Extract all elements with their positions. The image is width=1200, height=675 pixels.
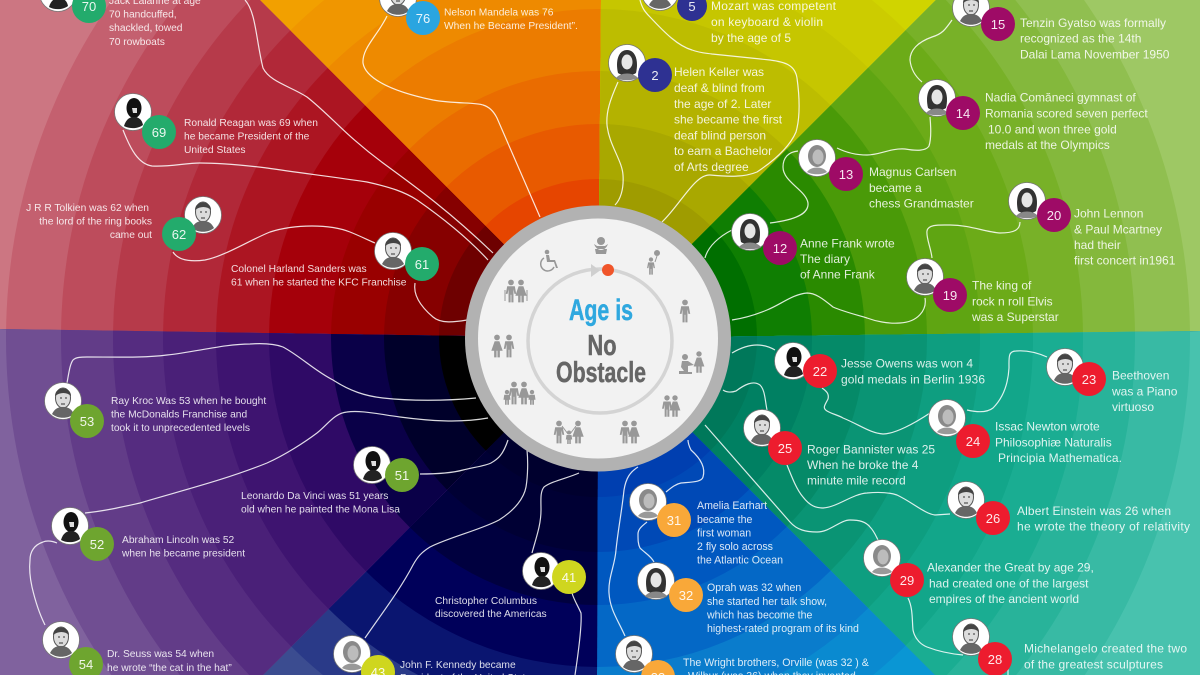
person: John F. Kennedy, 43 [334, 636, 536, 675]
person: Jack Lalanne, 70: 70 rowboats [109, 37, 165, 48]
person: Magnus Carlsen, 13: 13 [839, 167, 853, 182]
person: Anne Frank, 12: 12 [773, 241, 787, 256]
person: Leonardo Da Vinci, 51: 51 [395, 468, 409, 483]
person: Roger Bannister, 25: 25 [778, 441, 792, 456]
person: Ray Kroc, 53: 53 [80, 414, 94, 429]
person: Jesse Owens, 22 [774, 342, 985, 388]
person: Ronald Reagan, 69: United States [184, 145, 246, 156]
person: Magnus Carlsen, 13: chess Grandmaster [869, 196, 974, 210]
sector: purple, fifties [0, 329, 504, 675]
person: Amelia Earhart, 31: became the [697, 514, 752, 526]
person: Abraham Lincoln, 52 [52, 508, 245, 561]
person: John Lennon, 20 [1008, 182, 1176, 268]
sector: teal, twenties [692, 331, 1200, 675]
person: Dr. Seuss, 54: Dr. Seuss was 54 when [107, 649, 214, 660]
person: Ronald Reagan, 69: he became President of the [184, 132, 310, 142]
person: J R R Tolkien, 62 [26, 196, 222, 251]
person: Roger Bannister, 25: Roger Bannister was 25 [807, 442, 935, 456]
person: Abraham Lincoln, 52: Abraham Lincoln was 52 [122, 535, 235, 546]
person: Helen Keller, 2: the age of 2. Later [674, 97, 771, 111]
person: Magnus Carlsen, 13 [798, 140, 974, 210]
person: Albert Einstein, 26 [948, 482, 1190, 535]
person: Leonardo Da Vinci, 51: old when he painted the Mona Lisa [241, 504, 400, 516]
person: Amelia Earhart, 31: the Atlantic Ocean [697, 554, 783, 566]
person: J R R Tolkien, 62: 62 [172, 227, 186, 242]
person: Oprah, 32 [638, 562, 859, 635]
person: Magnus Carlsen, 13: Magnus Carlsen [869, 165, 956, 179]
person: Amelia Earhart, 31: 2 fly solo across [697, 541, 773, 553]
person: Colonel Harland Sanders, 61: 61 [415, 257, 429, 272]
person: Jesse Owens, 22: 22 [813, 364, 827, 379]
person: Christopher Columbus, 41: discovered the Americas [435, 609, 547, 620]
person: Alexander the Great, 29: empires of the ancient world [929, 592, 1079, 606]
person: Beethoven, 23: 23 [1082, 372, 1096, 387]
person: Mozart, 5: on keyboard & violin [711, 15, 823, 29]
person: Elvis, 19: rock n roll Elvis [972, 294, 1053, 308]
person: Jack Lalanne, 70 [40, 0, 201, 48]
person: Isaac Newton, 24: Principia Mathematica. [998, 451, 1122, 465]
person: Isaac Newton, 24: Issac Newton wrote [995, 420, 1100, 434]
person: Nadia Comaneci, 14 [918, 80, 1148, 152]
person: Ray Kroc, 53: Ray Kroc Was 53 when he bought [111, 396, 266, 407]
person: Isaac Newton, 24: Philosophiæ Naturalis [995, 436, 1112, 450]
title: Age is No Obstacle: No [588, 330, 616, 362]
person: Nelson Mandela, 76: 76 [416, 11, 430, 26]
person: John Lennon, 20: had their [1074, 238, 1121, 252]
person: Anne Frank, 12: The diary [800, 252, 850, 266]
person: Isaac Newton, 24 [928, 400, 1122, 465]
title: Age is No Obstacle: Obstacle [556, 357, 646, 389]
sector: blue, thirties [597, 432, 935, 675]
person: J R R Tolkien, 62: the lord of the ring books [39, 216, 152, 228]
person: Jack Lalanne, 70: 70 handcuffed, [109, 10, 177, 20]
sector: navy, forties [264, 432, 598, 675]
life-stage icons [491, 237, 704, 444]
icon: parents and child [554, 421, 584, 444]
person: John Lennon, 20: & Paul Mcartney [1074, 222, 1162, 236]
person: Magnus Carlsen, 13: became a [869, 181, 922, 195]
person: Tenzin Gyatso, 15 [952, 0, 1170, 62]
person: Wright brothers, 33: The Wright brothers, Orville (was 32 ) & [683, 657, 869, 669]
person: Michelangelo, 28: 28 [988, 652, 1002, 667]
sector: green, teens [692, 0, 1200, 336]
person: Ray Kroc, 53: took it to unprecedented levels [111, 423, 250, 434]
person: Nadia Comaneci, 14: Romania scored seven perfect [985, 106, 1148, 120]
title: Age is No Obstacle [556, 294, 646, 389]
title: Age is No Obstacle: Age is [569, 294, 633, 327]
person: Ronald Reagan, 69: Ronald Reagan was 69 when [184, 118, 318, 129]
person: Beethoven, 23: virtuoso [1112, 400, 1154, 414]
person: John Lennon, 20: John Lennon [1074, 206, 1143, 220]
icon: family of four [503, 382, 536, 405]
person: John Lennon, 20: 20 [1047, 208, 1061, 223]
hub outer grey ring [465, 206, 731, 472]
person: Nelson Mandela, 76 [380, 0, 578, 35]
person: Roger Bannister, 25: When he broke the 4 [807, 458, 919, 472]
person: Anne Frank, 12: Anne Frank wrote [800, 236, 895, 250]
person: Michelangelo, 28: Michelangelo created the two [1024, 642, 1187, 656]
icon: adult couple [491, 335, 514, 357]
person: Leonardo Da Vinci, 51: Leonardo Da Vinci was 51 years [241, 491, 388, 502]
person: Anne Frank, 12: of Anne Frank [800, 268, 876, 282]
person: John F. Kennedy, 43: John F. Kennedy became [400, 660, 516, 671]
icon: man [680, 300, 690, 322]
person: Roger Bannister, 25: minute mile record [807, 474, 906, 488]
person: Beethoven, 23: Beethoven [1112, 368, 1169, 382]
person: Mozart, 5: by the age of 5 [711, 31, 791, 45]
icon: couple [662, 395, 680, 417]
person: Wright brothers, 33 [616, 636, 869, 675]
person: Ray Kroc, 53 [44, 382, 266, 438]
person: Alexander the Great, 29 [864, 540, 1094, 606]
icon: baby [594, 237, 608, 254]
person: Oprah, 32: 32 [679, 588, 693, 603]
person: Anne Frank, 12 [732, 214, 895, 282]
person: Albert Einstein, 26: 26 [986, 511, 1000, 526]
person: Amelia Earhart, 31 [630, 484, 783, 566]
hub: central dial with life stages [465, 206, 731, 472]
person: Isaac Newton, 24: 24 [966, 434, 980, 449]
sector: yellow, childhood [599, 0, 936, 244]
sector: red, ages 60s [0, 0, 504, 336]
person: Christopher Columbus, 41: Christopher Columbus [435, 596, 537, 607]
icon: wheelchair [541, 250, 558, 271]
icon: child with balloon [647, 250, 660, 275]
person: Jack Lalanne, 70: shackled, towed [109, 23, 183, 34]
person: Helen Keller, 2: of Arts degree [674, 160, 749, 174]
person: Jesse Owens, 22: Jesse Owens was won 4 [841, 356, 973, 370]
person: Nadia Comaneci, 14: medals at the Olympics [985, 138, 1110, 152]
person: Ronald Reagan, 69: 69 [152, 125, 166, 140]
person: Helen Keller, 2: 2 [651, 68, 659, 83]
person: Amelia Earhart, 31: first woman [697, 528, 751, 540]
person: Albert Einstein, 26: he wrote the theory of relativity [1017, 520, 1190, 534]
person: Christopher Columbus, 41 [435, 552, 586, 620]
person: J R R Tolkien, 62: J R R Tolkien was 62 when [26, 203, 149, 214]
person: Tenzin Gyatso, 15: Tenzin Gyatso was formally [1020, 16, 1166, 30]
icon: couple with baby [620, 421, 640, 443]
person: Roger Bannister, 25 [744, 410, 935, 488]
person: Oprah, 32: she started her talk show, [707, 596, 827, 608]
person: Oprah, 32: which has become the [706, 610, 813, 622]
person: Helen Keller, 2: Helen Keller was [674, 65, 764, 79]
person: Nadia Comaneci, 14: 10.0 and won three gold [988, 122, 1117, 136]
person: Elvis, 19: 19 [943, 288, 957, 303]
person: Colonel Harland Sanders, 61: Colonel Harland Sanders was [231, 264, 367, 275]
person: Abraham Lincoln, 52: when he became president [121, 548, 245, 560]
person: Colonel Harland Sanders, 61 [231, 232, 439, 288]
person: Elvis, 19: was a Superstar [971, 310, 1059, 324]
person: Tenzin Gyatso, 15: recognized as the 14th [1020, 32, 1141, 46]
person: Dr. Seuss, 54 [42, 622, 232, 675]
person: Colonel Harland Sanders, 61: 61 when he started the KFC Franchise [231, 278, 407, 288]
person: Helen Keller, 2: deaf blind person [674, 128, 766, 142]
person: Leonardo Da Vinci, 51 [241, 446, 419, 516]
person: Helen Keller, 2: deaf & blind from [674, 81, 765, 95]
person: Dr. Seuss, 54: 54 [79, 657, 93, 672]
person: Ronald Reagan, 69 [114, 94, 318, 156]
person: Nelson Mandela, 76: When he Became President”. [444, 21, 578, 32]
person: Helen Keller, 2: to earn a Bachelor [674, 144, 772, 158]
person: Alexander the Great, 29: 29 [900, 573, 914, 588]
person: Oprah, 32: Oprah was 32 when [707, 582, 801, 594]
person: Elvis, 19: The king of [972, 278, 1032, 292]
person: Tenzin Gyatso, 15: 15 [991, 17, 1005, 32]
person: Mozart, 5 [642, 0, 837, 45]
person: Nadia Comaneci, 14: 14 [956, 106, 970, 121]
person: John Lennon, 20: first concert in1961 [1074, 254, 1176, 268]
person: Ray Kroc, 53: the McDonalds Franchise and [111, 410, 247, 420]
hub white disc [478, 218, 718, 458]
icon: elderly couple [505, 280, 527, 302]
person: Amelia Earhart, 31: 31 [667, 513, 681, 528]
person: Michelangelo, 28 [952, 618, 1187, 675]
person: Albert Einstein, 26: Albert Einstein was 26 when [1017, 504, 1171, 518]
person: Tenzin Gyatso, 15: Dalai Lama November 1950 [1020, 48, 1170, 62]
person: Nelson Mandela, 76: Nelson Mandela was 76 [444, 8, 554, 18]
person: Michelangelo, 28: of the greatest sculptures [1024, 658, 1163, 672]
person: Jesse Owens, 22: gold medals in Berlin 1936 [841, 372, 985, 386]
person: Amelia Earhart, 31: Amelia Earhart [697, 500, 767, 512]
person: Alexander the Great, 29: had created one of the largest [929, 576, 1089, 590]
person: Christopher Columbus, 41: 41 [562, 570, 576, 585]
person: Dr. Seuss, 54: he wrote “the cat in the hat” [107, 663, 232, 674]
icon: kneeling proposal [679, 351, 704, 374]
person: Abraham Lincoln, 52: 52 [90, 537, 104, 552]
person: Nadia Comaneci, 14: Nadia Comăneci gymnast of [985, 90, 1136, 104]
person: Oprah, 32: highest-rated program of its kind [707, 623, 859, 635]
person: Beethoven, 23 [1046, 348, 1178, 414]
person: Helen Keller, 2 [608, 44, 783, 174]
sector: orange, ages 70s [260, 0, 601, 244]
person: J R R Tolkien, 62: came out [110, 230, 152, 241]
person: Alexander the Great, 29: Alexander the Great by age 29, [927, 560, 1094, 574]
person: Elvis, 19 [906, 258, 1059, 324]
person: Helen Keller, 2: she became the first [674, 112, 783, 126]
person: Beethoven, 23: was a Piano [1111, 384, 1178, 398]
inner circular arrow [528, 264, 672, 413]
